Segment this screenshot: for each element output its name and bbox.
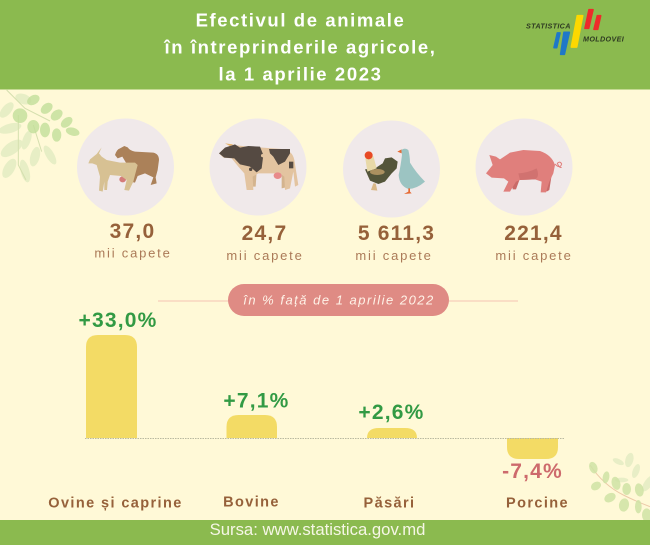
- title: [164, 10, 436, 84]
- divider line: [158, 300, 518, 302]
- bar: Ovine și caprine: [86, 335, 137, 438]
- value labels: [78, 309, 563, 483]
- category labels: Ovine și caprine: [48, 496, 183, 512]
- category labels: Bovine: [223, 494, 280, 510]
- value labels: +2,6%: [358, 401, 425, 424]
- title: Efectivul de animale: [196, 10, 405, 30]
- stat: 37,0 mii capete: [94, 220, 172, 260]
- value labels: -7,4%: [502, 460, 563, 483]
- panel: pigs: [476, 118, 573, 263]
- stat: 5 611,3 mii capete: [355, 222, 435, 263]
- bar: Păsări: [367, 428, 417, 438]
- comparison label pill: în % față de 1 aprilie 2022: [243, 292, 435, 308]
- bar chart: [48, 309, 569, 512]
- bar: Bovine: [226, 415, 277, 438]
- stat: 221,4 mii capete: mii capete: [495, 248, 573, 263]
- comparison label pill: [228, 284, 449, 316]
- logo: Statistica Moldovei: STATISTICA: [526, 22, 571, 30]
- title: în întreprinderile agricole,: [164, 36, 436, 58]
- stat: 24,7 mii capete: 24,7: [242, 222, 287, 245]
- category labels: Păsări: [364, 496, 415, 512]
- stat: 37,0 mii capete: 37,0: [110, 220, 155, 243]
- bar: Porcine: [507, 438, 558, 459]
- title: la 1 aprilie 2023: [218, 64, 382, 84]
- decoration: leaves bottom right: [588, 452, 650, 522]
- stat: 37,0 mii capete: mii capete: [94, 246, 172, 260]
- stat: 5 611,3 mii capete: mii capete: [355, 248, 433, 263]
- stat: 24,7 mii capete: mii capete: [226, 248, 304, 263]
- icon: pig: [476, 118, 572, 216]
- header band: [0, 0, 650, 90]
- decoration: leaves top left: [0, 90, 80, 183]
- logo: Statistica Moldovei: [526, 10, 625, 54]
- stat: 5 611,3 mii capete: 5 611,3: [358, 222, 435, 245]
- stat: 221,4 mii capete: 221,4: [504, 222, 563, 245]
- panel: sheep and goats: [77, 118, 174, 260]
- stat: 221,4 mii capete: [495, 222, 573, 263]
- icon: rooster and goose: [343, 120, 440, 218]
- stat: 24,7 mii capete: [226, 222, 304, 263]
- source text: Sursa: www.statistica.gov.md: [210, 520, 425, 539]
- footer band: [0, 520, 650, 545]
- category labels: [48, 494, 569, 512]
- panel: cattle: [210, 118, 306, 263]
- value labels: +33,0%: [78, 309, 158, 332]
- panel: poultry: [343, 120, 440, 263]
- chart baseline: [85, 438, 564, 440]
- logo: Statistica Moldovei: MOLDOVEI: [583, 34, 625, 44]
- value labels: +7,1%: [223, 390, 290, 412]
- icon: cow: [210, 118, 306, 216]
- icon: goat and sheep: [77, 118, 174, 216]
- category labels: Porcine: [506, 496, 569, 512]
